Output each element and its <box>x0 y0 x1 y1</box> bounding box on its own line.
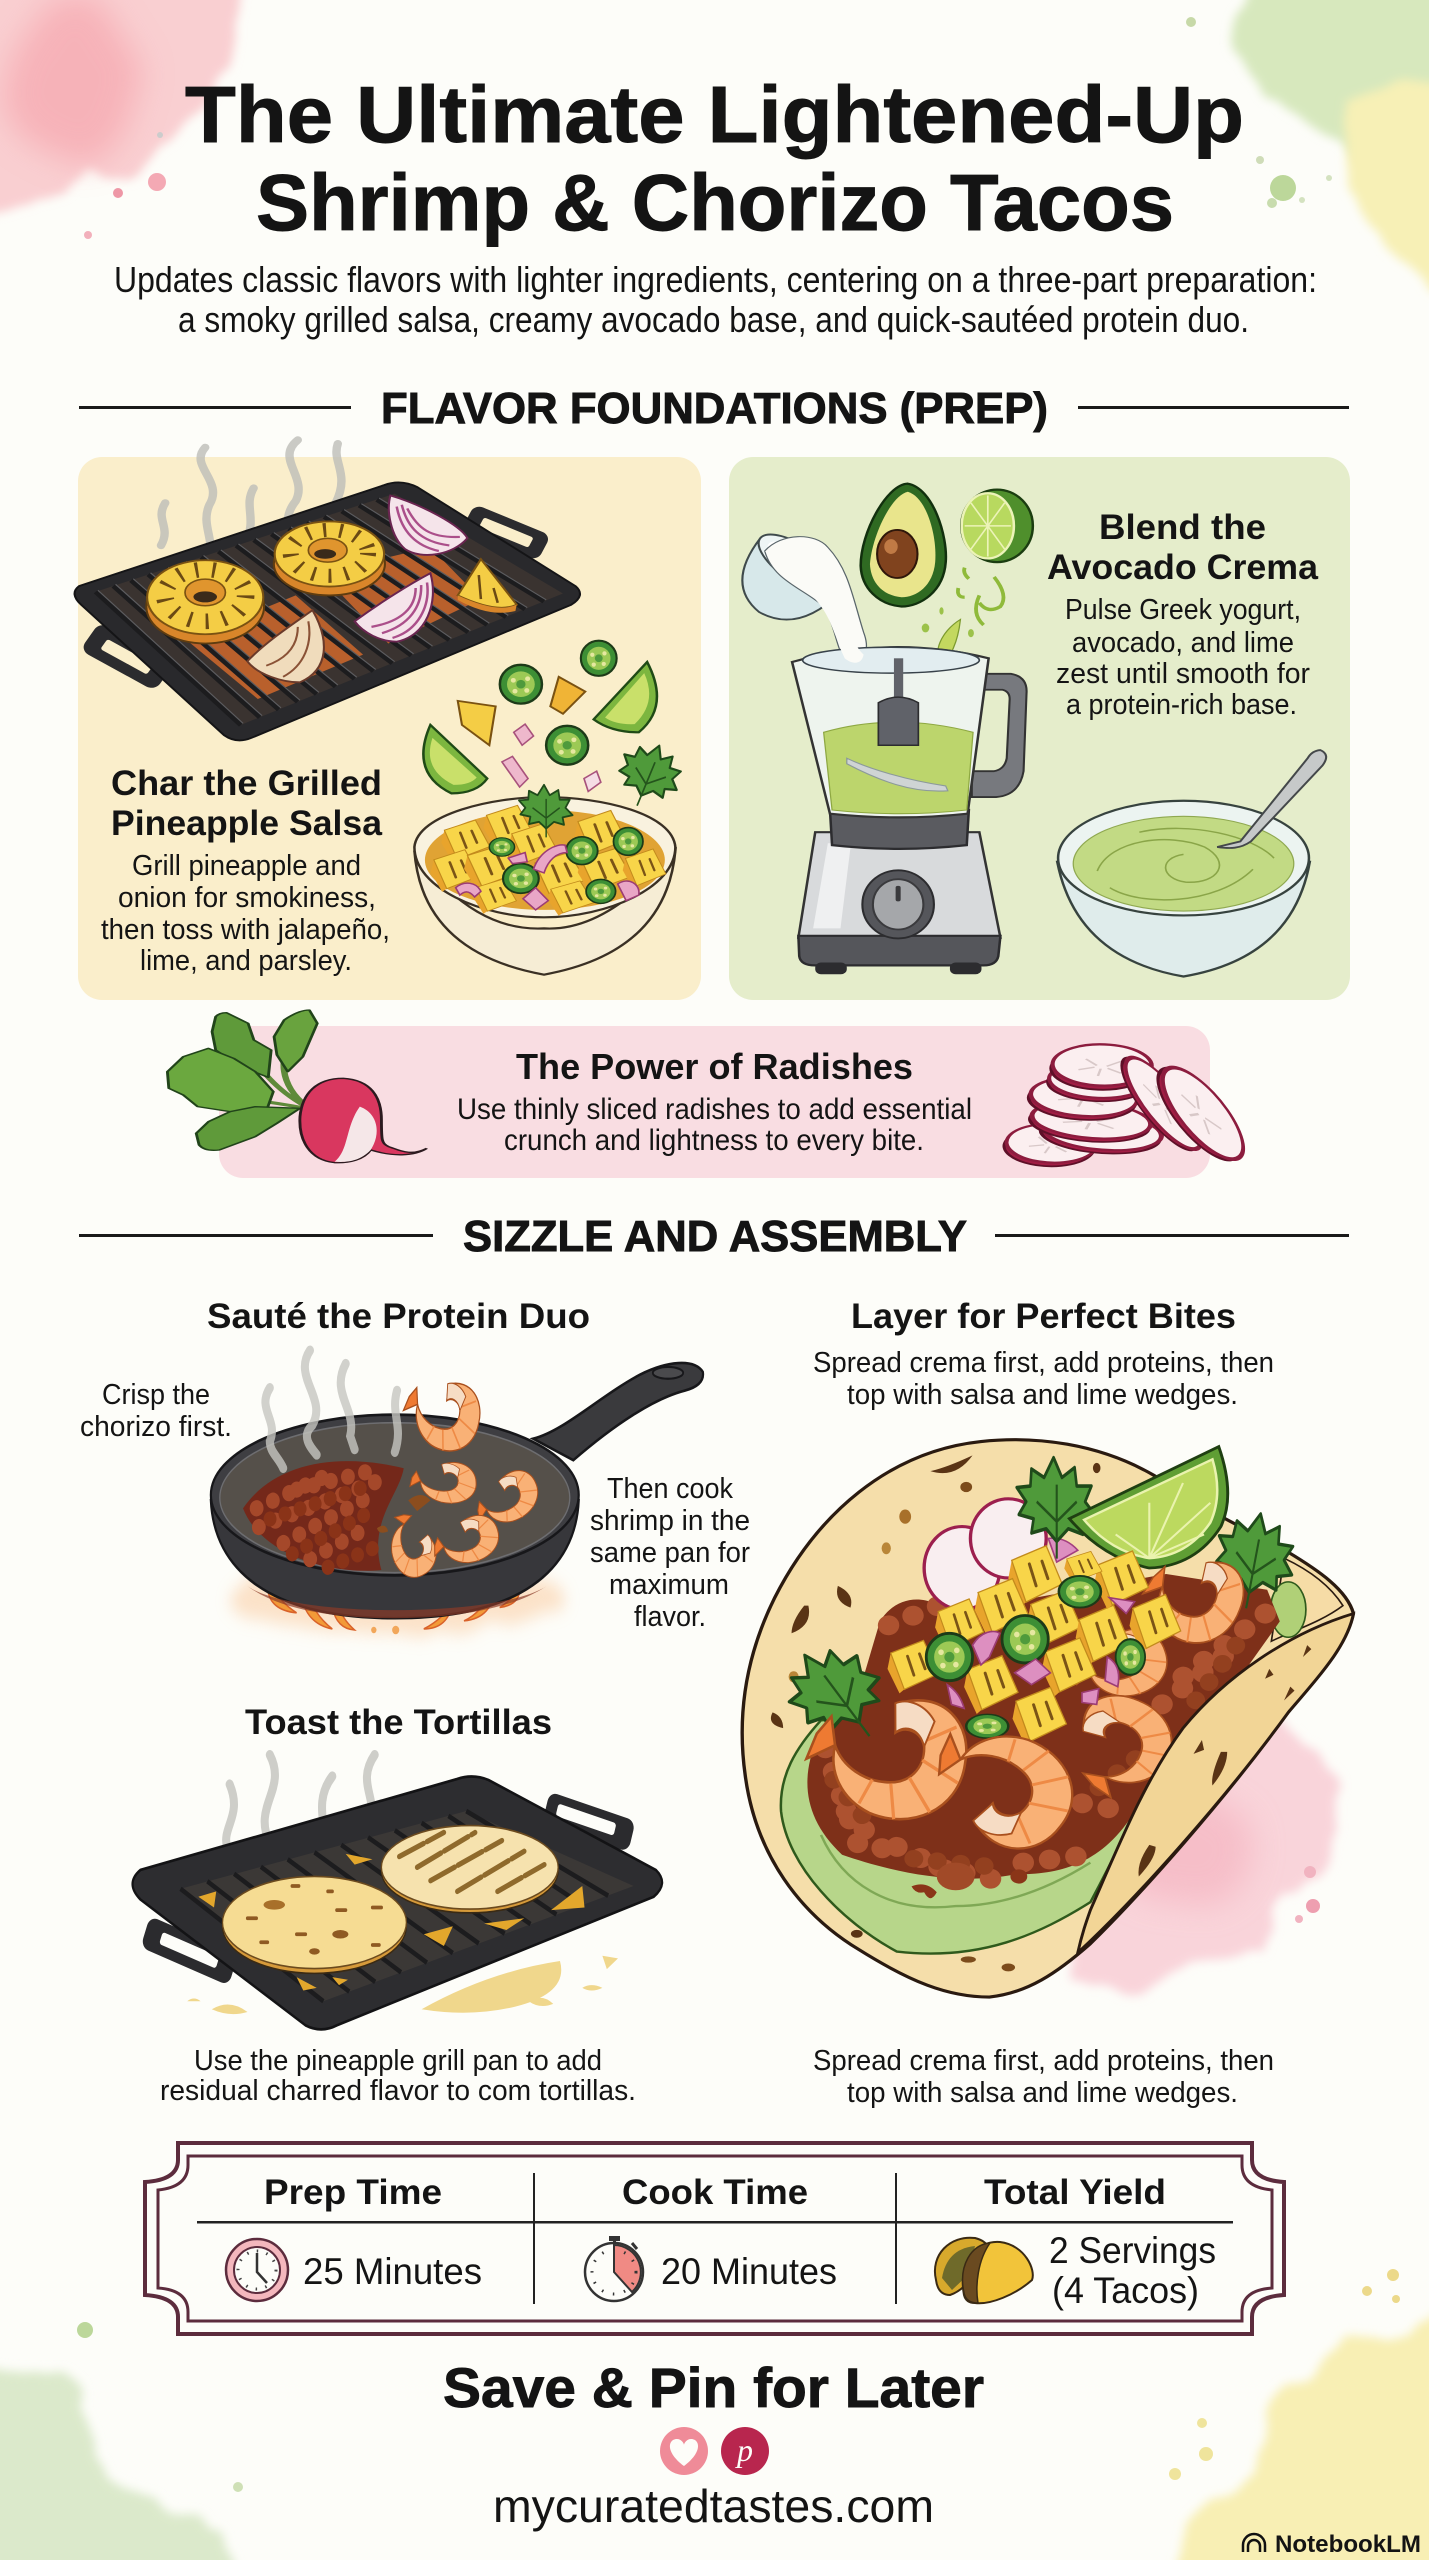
icon: clock <box>226 2239 288 2301</box>
illustration: skillet with chorizo and shrimp <box>211 1350 703 1634</box>
illustration: grill pan with tortillas <box>133 1755 662 2029</box>
callout: crisp the chorizo: Crisp the <box>102 1379 210 1411</box>
stat: total yield <box>935 2173 1216 2311</box>
text: blend the avocado crema: Avocado Crema <box>1047 548 1319 587</box>
text: blend the avocado crema: Pulse Greek yogurt, <box>1065 594 1301 626</box>
panel: recipe stats <box>145 2143 1284 2334</box>
subtitle <box>114 259 1317 340</box>
watermark: notebooklm: NotebookLM <box>1275 2531 1421 2558</box>
stat: total yield: (4 Tacos) <box>1052 2270 1199 2311</box>
subtitle: a smoky grilled salsa, creamy avocado base, and quick-sautéed protein duo. <box>178 299 1249 340</box>
icon: sliced radishes <box>993 1041 1259 1172</box>
section heading: flavor foundations <box>79 384 1349 433</box>
step: layer for perfect bites <box>742 1297 1353 2109</box>
text: blend the avocado crema: avocado, and lime <box>1072 627 1294 659</box>
watercolor: bottom left green <box>0 2322 243 2560</box>
text: layer caption: Spread crema first, add proteins, then <box>813 2045 1274 2077</box>
title: Shrimp & Chorizo Tacos <box>256 158 1174 247</box>
callout: then cook shrimp: shrimp in the <box>590 1505 750 1537</box>
panel: char the grilled pineapple salsa <box>75 440 701 1000</box>
step: saute the protein duo <box>80 1297 750 1634</box>
title: The Ultimate Lightened-Up <box>185 70 1244 159</box>
watercolor: bottom right yellow <box>1169 2269 1429 2560</box>
stat: total yield: Total Yield <box>984 2173 1166 2212</box>
callout: crisp the chorizo <box>80 1379 232 1443</box>
text: toast caption: residual charred flavor to com tortillas. <box>160 2075 636 2107</box>
stat: cook time <box>585 2173 837 2301</box>
icon: stopwatch <box>585 2236 643 2301</box>
step: toast the tortillas: Toast the Tortillas <box>245 1703 552 1742</box>
text: char the grilled pineapple salsa: Pineapple Salsa <box>111 804 383 843</box>
text: blend the avocado crema <box>1047 508 1319 721</box>
text: layer instructions: top with salsa and lime wedges. <box>847 1379 1238 1411</box>
watercolor: pink behind taco <box>1070 1720 1340 1990</box>
callout: then cook shrimp: Then cook <box>607 1473 733 1505</box>
callout: then cook shrimp <box>590 1473 750 1633</box>
watercolor: top left pink <box>0 0 240 239</box>
callout: then cook shrimp: flavor. <box>634 1601 706 1633</box>
text: toast caption <box>160 2045 636 2107</box>
icon: radish with leaves <box>167 1010 427 1163</box>
stat: cook time: 20 Minutes <box>661 2251 837 2292</box>
illustration: blender, avocado, lime, crema bowl <box>719 484 1326 976</box>
callout: crisp the chorizo: chorizo first. <box>80 1411 232 1443</box>
panel: blend the avocado crema <box>719 457 1350 1000</box>
callout: then cook shrimp: same pan for <box>590 1537 750 1569</box>
icon: pinterest <box>721 2427 769 2475</box>
panel: the power of radishes <box>167 1010 1259 1178</box>
website: mycuratedtastes.com <box>493 2480 934 2532</box>
stat: total yield: 2 Servings <box>1049 2230 1216 2271</box>
text: the power of radishes: Use thinly sliced radishes to add essential <box>457 1093 972 1126</box>
stat: cook time: Cook Time <box>622 2173 808 2212</box>
text: blend the avocado crema: Blend the <box>1099 508 1266 547</box>
illustration: loaded taco <box>742 1440 1353 1997</box>
text: char the grilled pineapple salsa: then toss with jalapeño, <box>101 914 390 946</box>
text: char the grilled pineapple salsa <box>101 764 390 977</box>
text: layer instructions <box>813 1347 1274 1411</box>
stat: prep time: 25 Minutes <box>303 2251 482 2292</box>
watercolor: top right green and yellow <box>1186 0 1429 300</box>
icon: pinterest: p <box>735 2432 753 2468</box>
stat: prep time <box>226 2173 482 2301</box>
text: layer instructions: Spread crema first, add proteins, then <box>813 1347 1274 1379</box>
icon: heart <box>660 2427 708 2475</box>
step: toast the tortillas <box>133 1703 662 2107</box>
text: the power of radishes: The Power of Radishes <box>516 1046 913 1087</box>
call to action: Save & Pin for Later <box>443 2356 984 2419</box>
text: blend the avocado crema: zest until smooth for <box>1056 658 1310 690</box>
text: layer caption: top with salsa and lime wedges. <box>847 2077 1238 2109</box>
step: layer for perfect bites: Layer for Perfect Bites <box>851 1297 1236 1336</box>
icon: tacos <box>935 2238 1033 2303</box>
text: blend the avocado crema: a protein-rich base. <box>1066 689 1297 721</box>
title <box>185 70 1244 247</box>
text: char the grilled pineapple salsa: onion for smokiness, <box>118 882 376 914</box>
section heading: sizzle and assembly <box>79 1212 1349 1261</box>
step: saute the protein duo: Sauté the Protein Duo <box>207 1297 590 1336</box>
illustration: grill pan, pineapple, onion, salsa bowl <box>75 440 691 975</box>
callout: then cook shrimp: maximum <box>609 1569 729 1601</box>
text: the power of radishes <box>457 1046 972 1157</box>
section heading: sizzle and assembly: SIZZLE AND ASSEMBLY <box>463 1212 967 1261</box>
section heading: flavor foundations: FLAVOR FOUNDATIONS (PREP) <box>381 384 1048 433</box>
stat: prep time: Prep Time <box>264 2173 442 2212</box>
text: char the grilled pineapple salsa: Char the Grilled <box>111 764 382 803</box>
text: char the grilled pineapple salsa: lime, and parsley. <box>140 945 352 977</box>
text: layer caption <box>813 2045 1274 2109</box>
text: the power of radishes: crunch and lightness to every bite. <box>504 1124 924 1157</box>
subtitle: Updates classic flavors with lighter ingredients, centering on a three-part preparation: <box>114 259 1317 300</box>
text: toast caption: Use the pineapple grill pan to add <box>194 2045 602 2077</box>
text: char the grilled pineapple salsa: Grill pineapple and <box>132 850 361 882</box>
